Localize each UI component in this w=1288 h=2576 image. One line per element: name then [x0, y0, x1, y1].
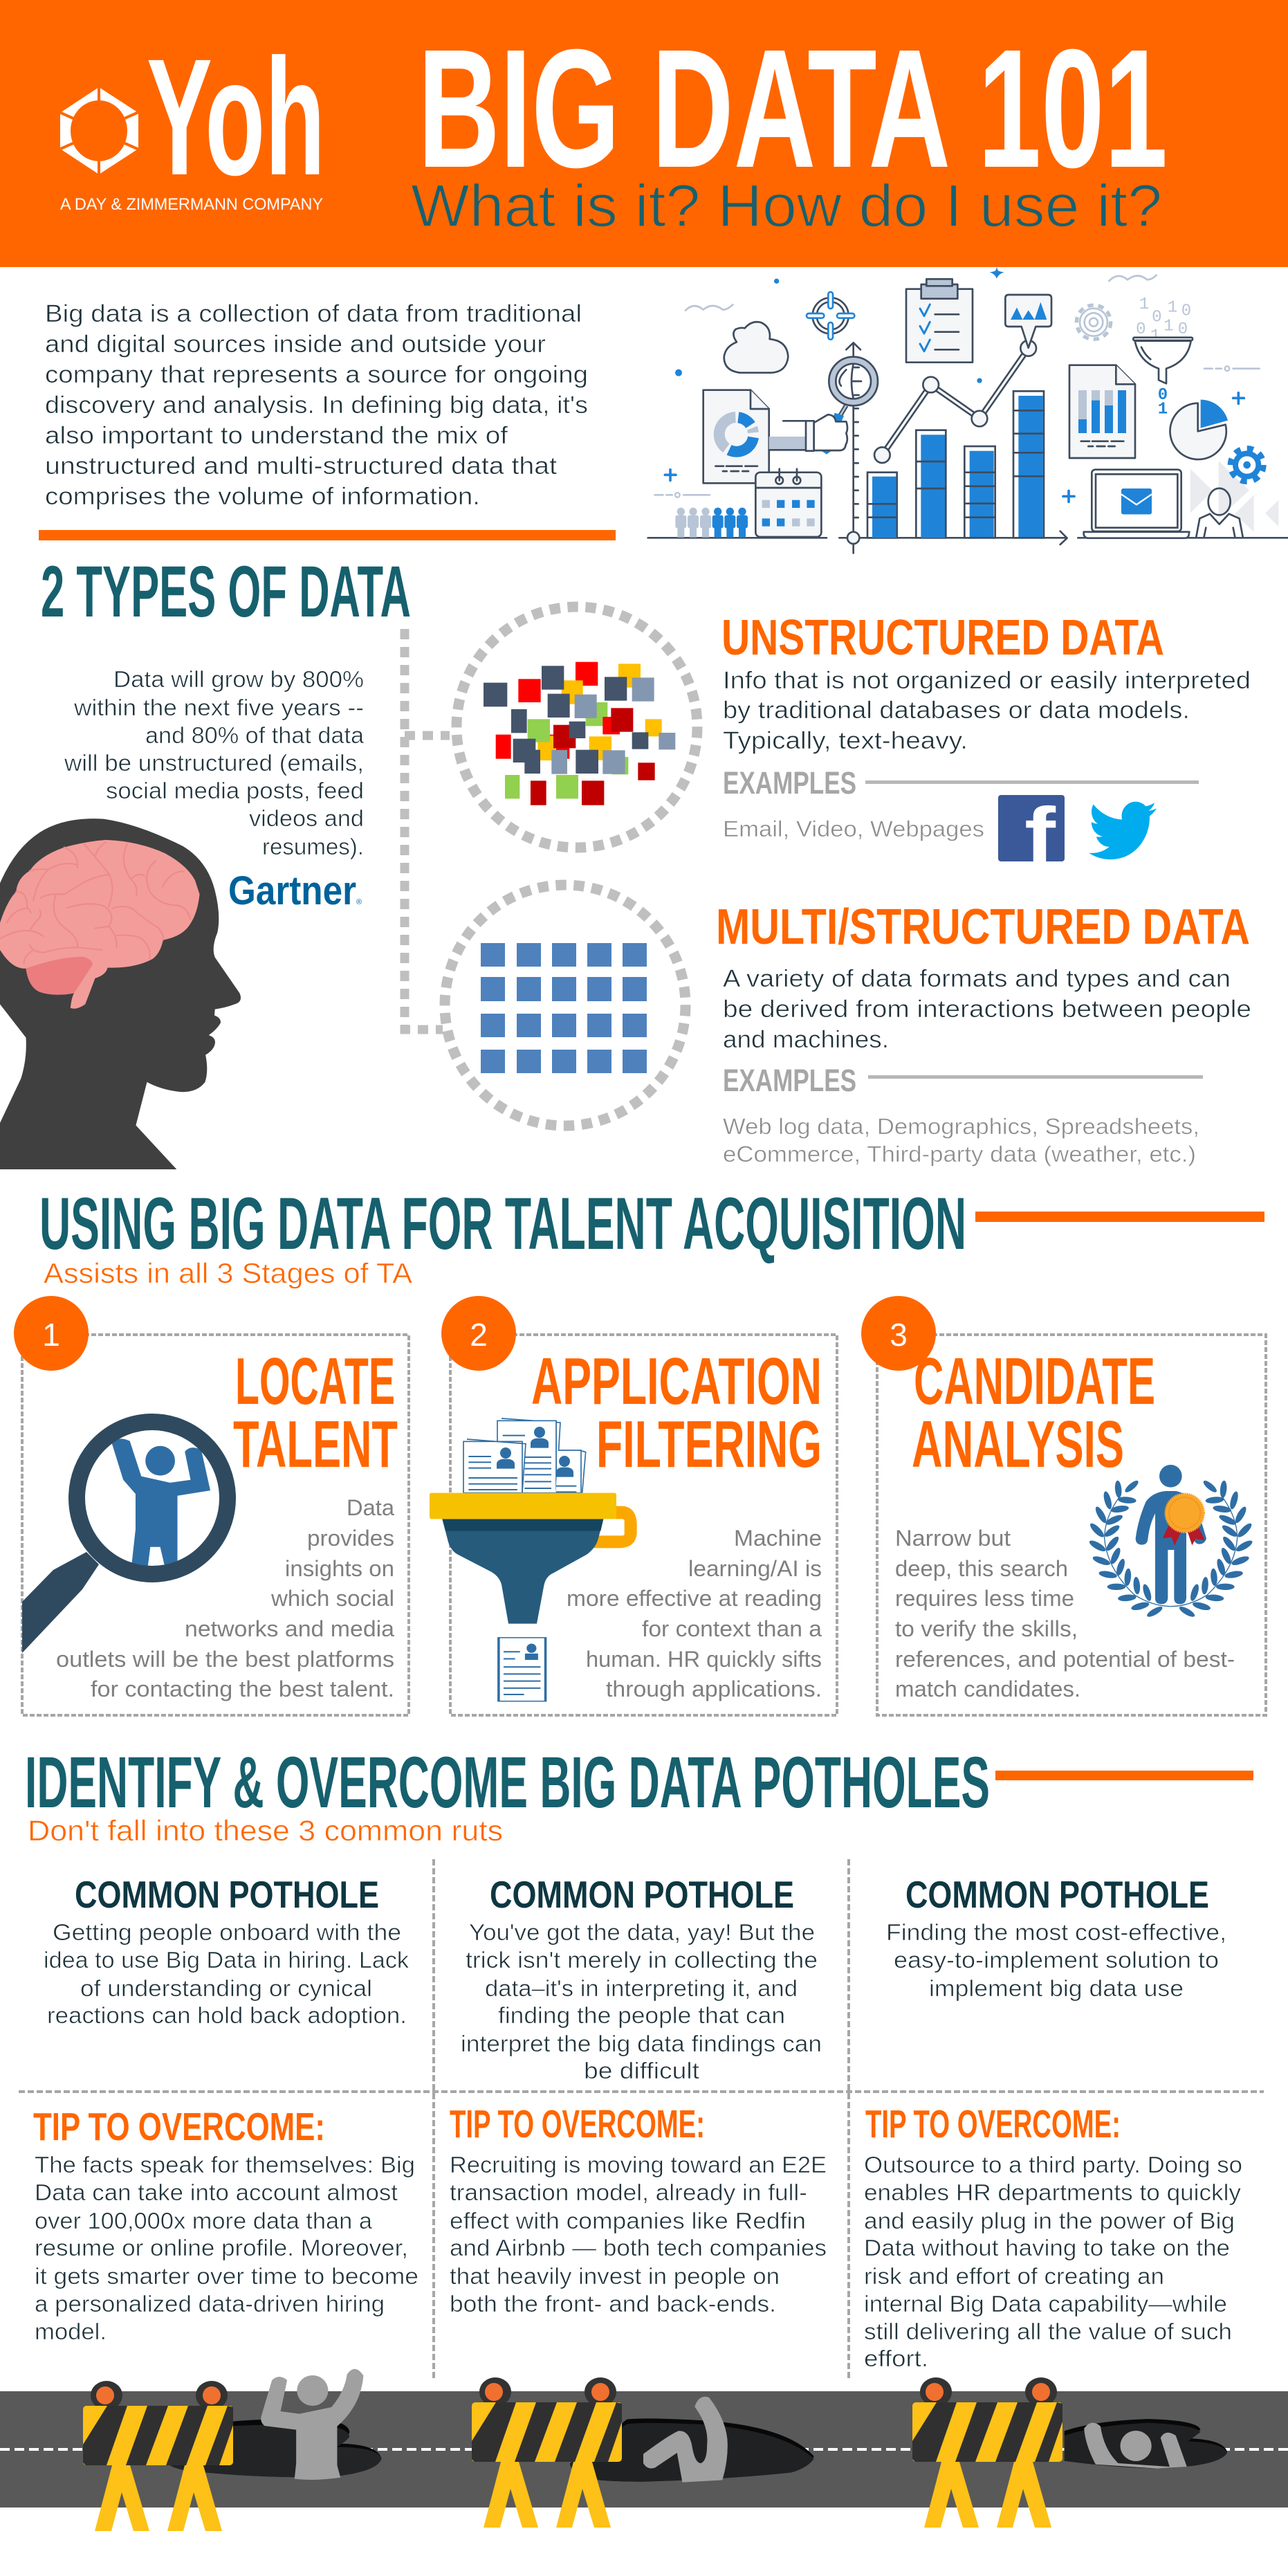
panel: multi-structured data: and machines. [723, 1026, 889, 1053]
panel: multi-structured data: eCommerce, Third-party data (weather, etc.) [723, 1142, 1196, 1167]
panel: locate talent [14, 1296, 409, 1715]
panel: candidate analysis: references, and potential of best- [895, 1647, 1235, 1672]
panel: unstructured data: Info that is not organized or easily interpreted [723, 667, 1251, 694]
text: gartner statistic: and 80% of that data [145, 722, 365, 748]
text: application filtering: APPLICATION [531, 1344, 822, 1418]
circle: unstructured data [457, 607, 697, 848]
icon: magnifier [829, 357, 878, 417]
icon: funnel with resumes [430, 1418, 637, 1624]
illustration: analytics right: 1 [1158, 401, 1168, 419]
head silhouette [0, 819, 241, 1169]
panel: multi-structured data: EXAMPLES [723, 1063, 856, 1098]
panel: application filtering: more effective at reading [567, 1586, 822, 1611]
column 2: common pothole: COMMON POTHOLE [490, 1873, 794, 1916]
column 3: tip [864, 2102, 1242, 2371]
panel: locate talent: Data [347, 1495, 394, 1520]
panel: unstructured data: Email, Video, Webpages [723, 816, 984, 841]
header band [0, 0, 1288, 267]
figure: arms raised [261, 2369, 363, 2480]
column 3: common pothole: COMMON POTHOLE [905, 1873, 1209, 1916]
grid dividers [19, 1859, 1264, 2379]
column 2: tip: effect with companies like Redfin [450, 2208, 806, 2234]
icon: user [1196, 488, 1243, 537]
intro paragraph [45, 300, 588, 510]
icon: single resume [499, 1638, 546, 1701]
intro paragraph: discovery and analysis. In defining big data, it's [45, 392, 588, 419]
intro paragraph: also important to understand the mix of [45, 422, 508, 449]
icon: chart bubble [1005, 295, 1051, 356]
illustration: analytics right [964, 267, 1288, 545]
pothole 1 with figure [170, 2369, 381, 2480]
column 3: tip: still delivering all the value of such [864, 2319, 1232, 2344]
icon: facebook: f [1024, 792, 1056, 878]
chart: bars 1 and 2 [867, 430, 946, 538]
column 2: common pothole: finding the people that can [498, 2002, 785, 2028]
column 1: tip: The facts speak for themselves: Big [35, 2152, 415, 2177]
figure: sinking arm [643, 2397, 728, 2483]
road [0, 2391, 1288, 2508]
column 2: tip: TIP TO OVERCOME: [450, 2102, 705, 2146]
heading: talent acquisition: Assists in all 3 Stages of TA [44, 1257, 413, 1289]
column 1: tip: resume or online profile. Moreover, [35, 2235, 408, 2260]
illustration: analytics left [648, 279, 1029, 553]
panel: application filtering: learning/AI is [688, 1556, 822, 1581]
connector: dotted lines [405, 629, 450, 1030]
column 2: common pothole: be difficult [584, 2058, 699, 2083]
column 1: tip: TIP TO OVERCOME: [33, 2105, 325, 2149]
icon: blue gear [1231, 448, 1264, 482]
column 3: tip: Outsource to a third party. Doing so [864, 2152, 1242, 2177]
grid of data blocks [481, 943, 647, 1073]
intro paragraph: and digital sources inside and outside your [45, 331, 546, 358]
logo: Yoh: A DAY & ZIMMERMANN COMPANY [60, 195, 323, 214]
panel: candidate analysis: to verify the skills, [895, 1616, 1078, 1641]
icon: magnifier with person [22, 1422, 228, 1653]
panel: multi-structured data [716, 899, 1251, 1167]
column 3: tip: TIP TO OVERCOME: [865, 2102, 1121, 2146]
panel: application filtering [430, 1296, 837, 1715]
icon: clipboard checklist [906, 279, 973, 363]
icon: binary digits [1136, 295, 1191, 345]
icon: pale gear [1076, 305, 1111, 339]
panel: locate talent: insights on [285, 1556, 394, 1581]
pothole 3 with figure [1065, 2419, 1227, 2469]
column 1: tip [33, 2105, 418, 2344]
column 2: tip [450, 2102, 827, 2317]
text: gartner statistic: within the next five years -- [73, 695, 364, 720]
head with brain [0, 819, 241, 1169]
figure: head and hands [1084, 2423, 1187, 2469]
icon: binary digits: 0 [1181, 302, 1191, 320]
intro paragraph: comprises the volume of information. [45, 483, 480, 510]
panel: unstructured data: by traditional databases or data models. [723, 697, 1190, 724]
column 3: tip: enables HR departments to quickly [864, 2180, 1242, 2205]
heading: potholes: Don't fall into these 3 common ruts [28, 1814, 503, 1847]
panel: candidate analysis: ANALYSIS [912, 1407, 1124, 1481]
icon: twitter [1089, 802, 1157, 859]
panel: application filtering: human. HR quickly sifts [586, 1647, 822, 1672]
column 1: tip: model. [35, 2319, 107, 2344]
orange rule [39, 530, 616, 540]
text: gartner statistic: videos and [249, 805, 364, 831]
column 2: common pothole: You've got the data, yay! But the [469, 1919, 815, 1945]
column 1: common pothole: Getting people onboard with the [53, 1919, 401, 1945]
column 2: common pothole [461, 1873, 822, 2083]
panel: unstructured data [721, 610, 1251, 878]
column 2: tip: transaction model, already in full- [450, 2180, 807, 2205]
icon: binary digits: 1 [1163, 318, 1174, 336]
column 1: tip: it gets smarter over time to become [35, 2263, 418, 2289]
panel: locate talent: provides [307, 1526, 394, 1551]
icon: document with bars [1069, 365, 1135, 458]
column 2: tip: both the front- and back-ends. [450, 2291, 776, 2317]
panel: locate talent: outlets will be the best platforms [56, 1647, 394, 1672]
icon: people row [675, 508, 748, 538]
text: gartner statistic: Data will grow by 800% [113, 666, 364, 692]
panel: application filtering: for context than a [642, 1616, 822, 1641]
icon: funnel [1133, 338, 1193, 383]
column 1: tip: over 100,000x more data than a [35, 2208, 373, 2234]
panel: multi-structured data: A variety of data formats and types and can [723, 965, 1231, 992]
barricade 1 [83, 2381, 233, 2531]
chart: trend line [874, 348, 1029, 463]
icon: binary digits: 0 [1152, 309, 1162, 327]
intro paragraph: company that represents a source for ongoing [45, 361, 588, 388]
column 2: tip: that heavily invest in people on [450, 2263, 780, 2289]
column 3: common pothole [886, 1873, 1226, 2001]
column 3: tip: and easily plug in the power of Big [864, 2208, 1235, 2234]
column 3: common pothole: Finding the most cost-effective, [886, 1919, 1226, 1945]
barricade 2 [472, 2377, 622, 2528]
column 1: common pothole [44, 1873, 410, 2028]
icon: number 2: 2 [470, 1317, 488, 1353]
icon: arm and hand [769, 413, 847, 455]
pothole 2 with figure [570, 2397, 814, 2483]
panel: locate talent: which social [270, 1586, 394, 1611]
column 3: tip: effort. [864, 2346, 928, 2371]
icon: target [807, 292, 854, 340]
logo: Yoh: Yoh [147, 24, 325, 210]
panel: candidate analysis: Narrow but [895, 1526, 1011, 1551]
intro paragraph: unstructured and multi-structured data that [45, 453, 557, 479]
icon: binary digits: 1 [1150, 327, 1160, 345]
column 2: tip: and Airbnb — both tech companies [450, 2235, 827, 2260]
icon: cloud [724, 322, 788, 373]
barricade 3 [912, 2377, 1062, 2528]
brain [0, 840, 200, 1009]
column 1: common pothole: reactions can hold back adoption. [47, 2002, 407, 2028]
subtitle: What is it? How do I use it? [411, 173, 1162, 239]
panel: application filtering: Machine [734, 1526, 822, 1551]
background triangles [1190, 461, 1278, 532]
text: gartner statistic [64, 666, 365, 859]
icon: number 2 [441, 1296, 516, 1371]
column 2: common pothole: data–it's in interpreting it, and [485, 1975, 798, 2001]
icon: number 1: 1 [42, 1317, 60, 1353]
icon: person in wreath with medal [1088, 1465, 1254, 1618]
icon: number 3: 3 [890, 1317, 908, 1353]
intro paragraph: Big data is a collection of data from traditional [45, 300, 582, 327]
panel: locate talent: for contacting the best talent. [91, 1677, 394, 1701]
heading: 2 types of data: 2 TYPES OF DATA [41, 551, 411, 632]
logo: Yoh [56, 24, 325, 214]
column 1: common pothole: COMMON POTHOLE [75, 1873, 379, 1916]
logo: Gartner: Gartner [228, 868, 356, 913]
icon: number 3 [861, 1296, 936, 1371]
icon: laptop with mail [1084, 470, 1189, 538]
column 3: tip: risk and effort of creating an [864, 2263, 1164, 2289]
column 1: tip: a personalized data-driven hiring [35, 2291, 385, 2317]
text: locate talent: LOCATE [235, 1344, 395, 1418]
icon: report document with donut [703, 390, 769, 483]
column 1: common pothole: of understanding or cynical [80, 1975, 372, 2001]
icon: binary digits: 1 [1168, 298, 1177, 317]
panel: candidate analysis: deep, this search [895, 1556, 1068, 1581]
logo: Gartner: ® [356, 898, 362, 906]
text: gartner statistic: social media posts, feed [106, 778, 364, 803]
illustration: analytics right: 0 [1158, 386, 1168, 405]
panel: multi-structured data: Web log data, Demographics, Spreadsheets, [723, 1114, 1199, 1139]
column 1: tip: Data can take into account almost [35, 2180, 398, 2205]
icon: calendar [755, 469, 821, 537]
column 3: tip: internal Big Data capability—while [864, 2291, 1227, 2317]
column 2: tip: Recruiting is moving toward an E2E [450, 2152, 827, 2177]
icon: pie chart [1170, 400, 1228, 459]
chart: bars 3 and 4 [964, 391, 1044, 538]
text: gartner statistic: resumes). [262, 834, 364, 859]
icon: binary digits: 0 [1136, 320, 1146, 339]
panel: unstructured data: Typically, text-heavy. [723, 727, 968, 754]
panel: application filtering: through applications. [606, 1677, 822, 1701]
panel: unstructured data: EXAMPLES [723, 765, 856, 801]
text: gartner statistic: will be unstructured (emails, [64, 750, 364, 776]
panel: locate talent: networks and media [185, 1616, 394, 1641]
panel: multi-structured data: be derived from interactions between people [723, 996, 1251, 1023]
icon: number 1 [14, 1296, 89, 1371]
column 1: common pothole: idea to use Big Data in hiring. Lack [44, 1947, 410, 1973]
column 2: common pothole: trick isn't merely in collecting the [466, 1947, 818, 1973]
scattered data blocks [484, 662, 675, 805]
panel: application filtering: FILTERING [596, 1407, 822, 1481]
panel: unstructured data: UNSTRUCTURED DATA [721, 610, 1164, 666]
circle: structured data [445, 885, 686, 1126]
column 3: common pothole: easy-to-implement solution to [894, 1947, 1219, 1973]
icon: binary digits: 0 [1178, 320, 1188, 339]
panel: locate talent: TALENT [233, 1407, 398, 1481]
column 2: common pothole: interpret the big data findings can [461, 2031, 822, 2056]
chart axes [648, 342, 970, 553]
panel: candidate analysis: match candidates. [895, 1677, 1080, 1701]
icon: facebook [998, 792, 1065, 878]
panel: candidate analysis: requires less time [895, 1586, 1074, 1611]
panel: candidate analysis [861, 1296, 1266, 1715]
icon: binary digits: 1 [1139, 295, 1149, 314]
column 3: common pothole: implement big data use [929, 1975, 1184, 2001]
column 3: tip: Data without having to take on the [864, 2235, 1230, 2260]
